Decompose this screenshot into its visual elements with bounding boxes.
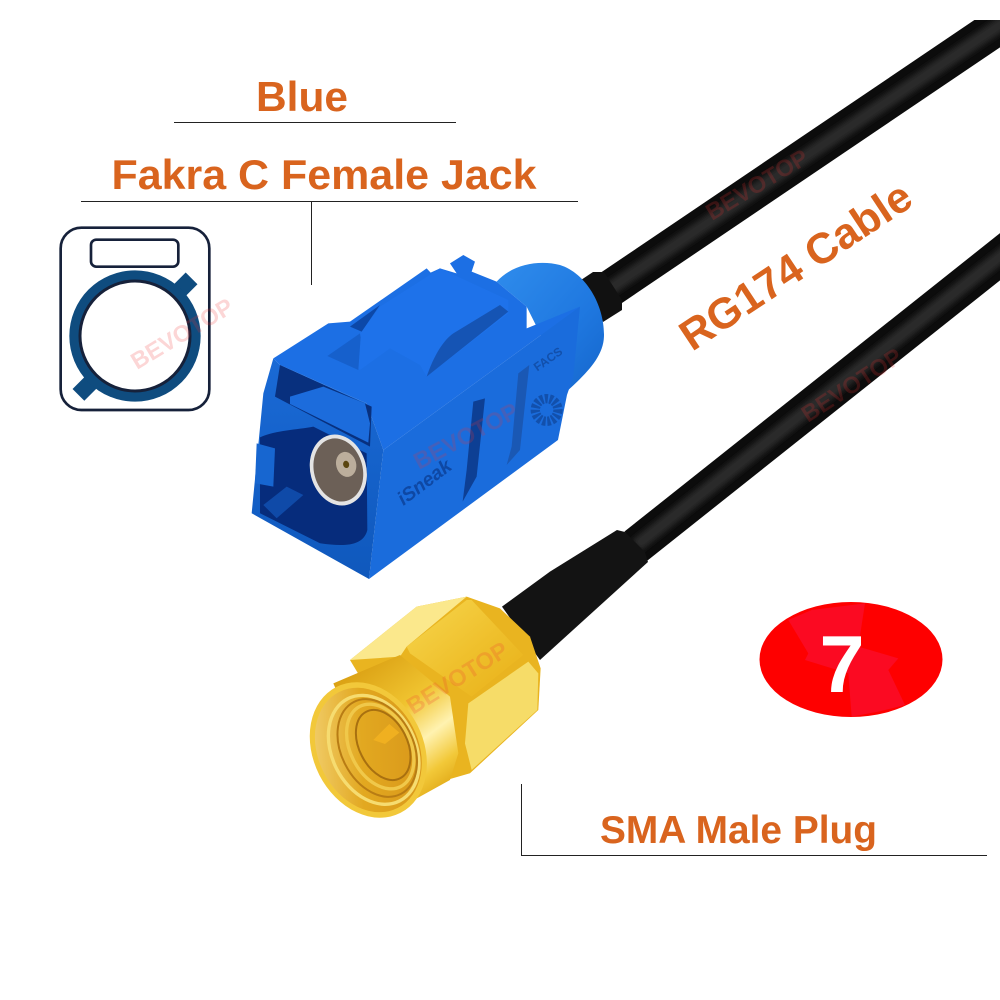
cable: lower RG174 (636, 0, 1000, 546)
hex facet upper (407, 600, 523, 697)
badge: number 7: 7 (819, 620, 865, 710)
watermarks: BEVOTOP (701, 144, 813, 225)
sleeve front rim (287, 662, 449, 838)
connector front face (252, 358, 383, 579)
connector barrel (497, 263, 604, 390)
heading: Fakra C Female Jack: Fakra C Female Jack (112, 151, 537, 198)
connector icon: Fakra C keying (61, 228, 209, 410)
heat shrink (502, 530, 648, 660)
watermarks: BEVOTOP (409, 398, 522, 474)
heading: Blue: Blue (256, 73, 348, 120)
connector top face (273, 255, 580, 450)
cable: upper RG174 (578, 0, 1000, 322)
watermarks: BEVOTOP (402, 637, 513, 719)
connector socket opening (260, 427, 367, 545)
hex facet lower (465, 662, 538, 770)
watermarks: BEVOTOP (797, 343, 907, 427)
SMA gold connector (287, 530, 648, 838)
center pin (373, 724, 399, 744)
coaxial socket (302, 428, 375, 512)
Fakra C blue connector: FACS (531, 344, 565, 374)
connector latch hump (327, 268, 508, 377)
connector latch window (275, 365, 372, 447)
connector side face (369, 307, 580, 579)
hex back face (350, 597, 467, 660)
threaded coupling sleeve (333, 655, 458, 813)
connector side logo: iSneak (394, 455, 457, 510)
label: SMA Male Plug: SMA Male Plug (600, 809, 877, 852)
Fakra C blue connector (252, 255, 604, 579)
badge: number 7 (760, 602, 942, 717)
watermarks (126, 144, 907, 719)
interior thread rings (311, 680, 437, 820)
hex nut collar (350, 597, 541, 780)
watermarks: BEVOTOP (126, 293, 238, 374)
label: RG174 Cable: RG174 Cable (671, 172, 921, 360)
